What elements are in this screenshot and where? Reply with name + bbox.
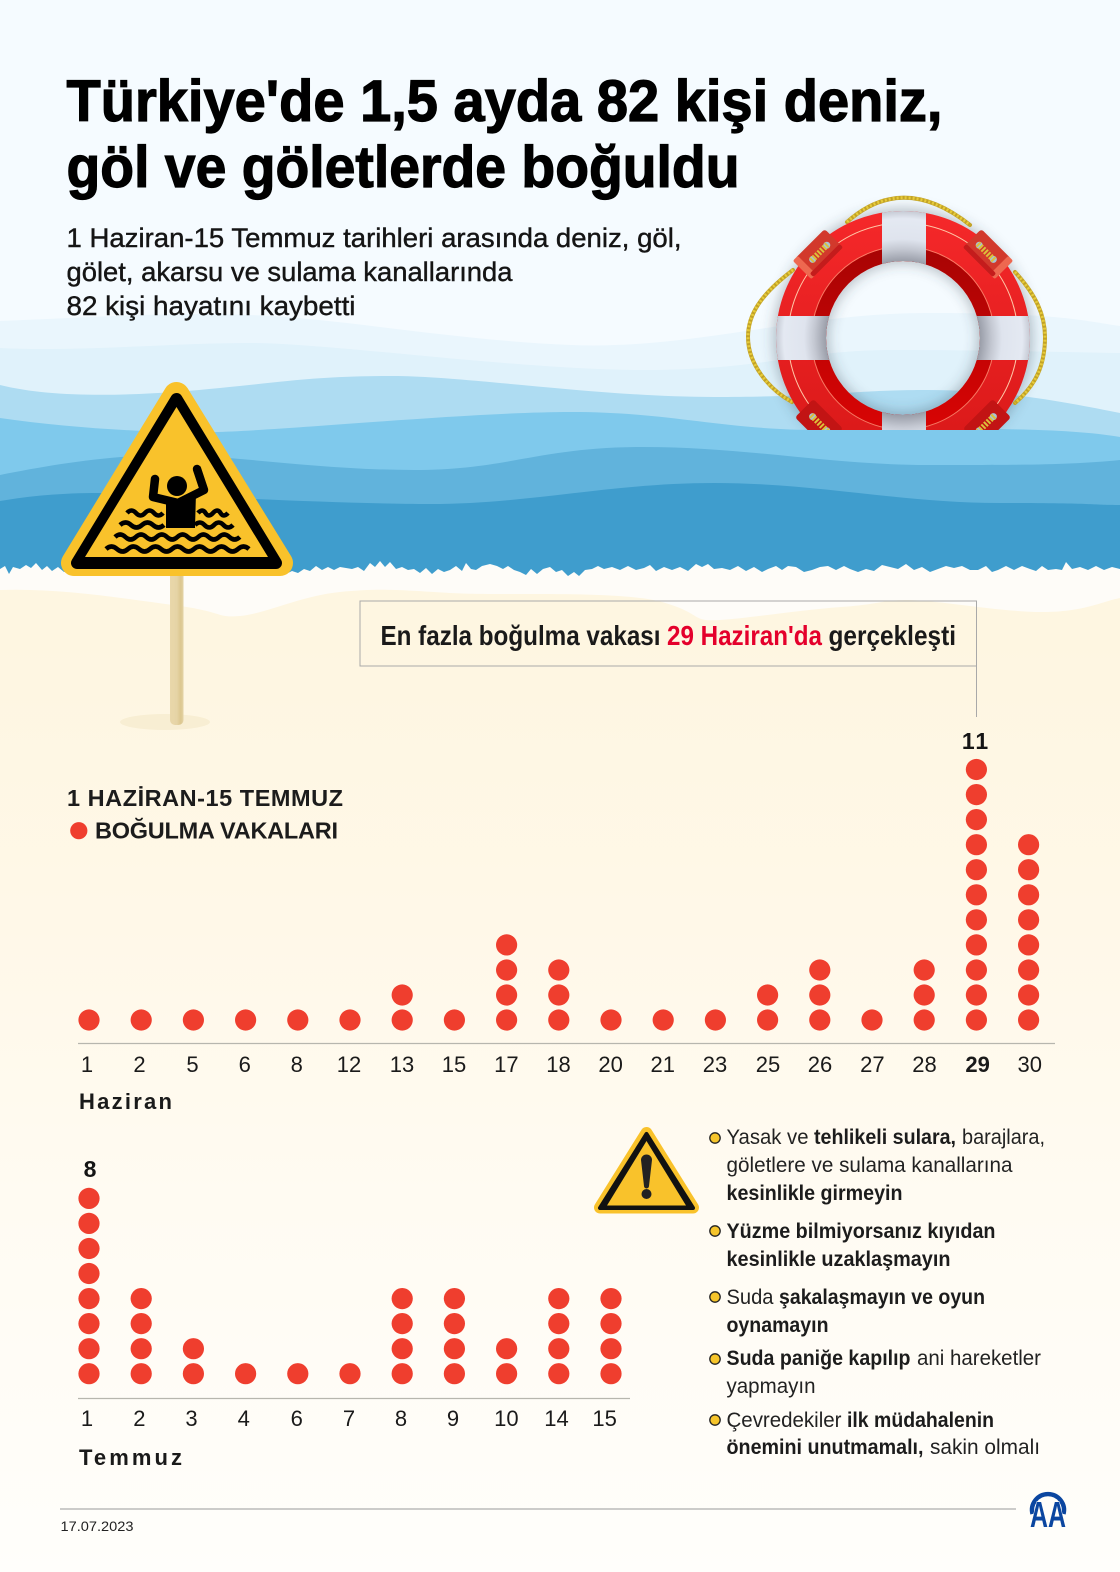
tip 5: önemini unutmamalı,	[726, 1435, 924, 1459]
tip 5: Çevredekiler	[726, 1408, 842, 1432]
tip 2: kesinlikle uzaklaşmayın	[726, 1247, 950, 1271]
handle: bottom right	[964, 400, 1010, 430]
axis labels: Haziran days: 1	[81, 1052, 93, 1077]
axis labels: Temmuz days: 10	[494, 1406, 519, 1431]
tip 4: yapmayın	[726, 1374, 816, 1398]
callout: peak day: En fazla boğulma vakası	[380, 620, 660, 651]
legend	[67, 785, 343, 843]
tip 5: ilk müdahalenin	[847, 1408, 994, 1432]
subtitle	[66, 223, 682, 321]
title: göl ve göletlerde boğuldu	[66, 135, 740, 200]
axis labels: Haziran days	[81, 1052, 1042, 1077]
background: foam edge	[0, 561, 1120, 700]
tip 1: barajlara,	[962, 1125, 1045, 1149]
logo: AA: AA	[1030, 1494, 1066, 1535]
tip 5: sakin olmalı	[930, 1435, 1040, 1459]
tip 1: Yasak ve	[726, 1125, 808, 1149]
legend: 1 HAZİRAN-15 TEMMUZ	[67, 785, 343, 811]
background: sea waves	[0, 313, 1120, 700]
axis labels: Temmuz days: 7	[343, 1406, 355, 1431]
month label: Temmuz: Temmuz	[79, 1445, 182, 1470]
handle: top left	[793, 229, 843, 279]
axis labels: Temmuz days: 1	[81, 1406, 93, 1431]
tip 5	[710, 1408, 1040, 1459]
axis labels: Temmuz days: 3	[185, 1406, 198, 1431]
axis labels: Haziran days: 28	[912, 1052, 937, 1077]
axis labels: Temmuz days: 15	[592, 1406, 617, 1431]
axis labels: Haziran days: 2	[133, 1052, 146, 1077]
background: sand	[0, 590, 1120, 1572]
safety tips list	[710, 1125, 1045, 1459]
callout: peak day	[360, 601, 976, 717]
subtitle: gölet, akarsu ve sulama kanallarında	[66, 257, 513, 287]
icon: warning triangle	[600, 1133, 693, 1208]
chart: Haziran dot plot	[78, 728, 1055, 1114]
axis labels: Haziran days: 8	[291, 1052, 303, 1077]
axis labels: Haziran days: 21	[651, 1052, 675, 1077]
axis labels: Haziran days: 6	[239, 1052, 251, 1077]
axis labels: Temmuz days: 14	[544, 1406, 569, 1431]
axis labels: Haziran days: 27	[860, 1052, 885, 1077]
tip 3: şakalaşmayın ve oyun	[779, 1285, 985, 1309]
tip 1: göletlere ve sulama kanallarına	[726, 1153, 1013, 1177]
peak value 8: 8	[84, 1156, 97, 1182]
tip 1	[710, 1125, 1045, 1205]
logo: AA	[1030, 1494, 1066, 1535]
axis labels: Haziran days: 15	[442, 1052, 466, 1077]
axis labels: Haziran days: 20	[598, 1052, 623, 1077]
subtitle: 1 Haziran-15 Temmuz tarihleri arasında deniz, göl,	[66, 223, 682, 253]
tip 3: Suda	[726, 1285, 774, 1309]
axis labels: Temmuz days: 4	[238, 1406, 250, 1431]
icon: lifebuoy	[748, 198, 1045, 453]
subtitle: 82 kişi hayatını kaybetti	[66, 291, 356, 321]
tip 2: Yüzme bilmiyorsanız kıyıdan	[726, 1219, 996, 1243]
axis labels: Haziran days: 26	[808, 1052, 832, 1077]
callout: peak day: 29 Haziran'da	[667, 620, 822, 651]
tip 3: oynamayın	[726, 1313, 828, 1337]
date: 17.07.2023	[60, 1519, 134, 1534]
tip 1: tehlikeli sulara,	[814, 1125, 956, 1149]
axis labels: Temmuz days	[81, 1406, 617, 1431]
legend: BOĞULMA VAKALARI	[95, 816, 338, 843]
callout: peak day: gerçekleşti	[828, 620, 956, 651]
icon: drowning warning sign on pole	[74, 395, 280, 730]
axis labels: Haziran days: 12	[337, 1052, 361, 1077]
tip 4	[710, 1346, 1041, 1398]
peak value 11: 11	[962, 728, 990, 754]
axis labels: Haziran days: 17	[494, 1052, 519, 1077]
month label: Haziran: Haziran	[79, 1089, 172, 1114]
title	[66, 69, 942, 200]
chart: Temmuz dot plot	[78, 1156, 630, 1470]
tip 3	[710, 1285, 985, 1337]
axis labels: Temmuz days: 8	[395, 1406, 407, 1431]
axis labels: Haziran days: 29	[965, 1052, 990, 1077]
axis labels: Haziran days: 23	[703, 1052, 727, 1077]
handle: bottom left	[796, 400, 842, 430]
axis labels: Haziran days: 25	[756, 1052, 780, 1077]
tip 4: ani hareketler	[917, 1346, 1041, 1370]
axis labels: Temmuz days: 9	[447, 1406, 459, 1431]
axis labels: Haziran days: 13	[390, 1052, 414, 1077]
tip 2	[710, 1219, 996, 1271]
axis labels: Haziran days: 30	[1017, 1052, 1042, 1077]
handle: top right	[963, 229, 1013, 279]
tip 1: kesinlikle girmeyin	[726, 1181, 902, 1205]
axis labels: Temmuz days: 2	[133, 1406, 146, 1431]
axis labels: Haziran days: 18	[546, 1052, 571, 1077]
title: Türkiye'de 1,5 ayda 82 kişi deniz,	[66, 69, 942, 134]
axis labels: Haziran days: 5	[186, 1052, 199, 1077]
footer rule	[60, 1508, 1016, 1510]
axis labels: Temmuz days: 6	[291, 1406, 303, 1431]
tip 4: Suda paniğe kapılıp	[726, 1346, 910, 1370]
